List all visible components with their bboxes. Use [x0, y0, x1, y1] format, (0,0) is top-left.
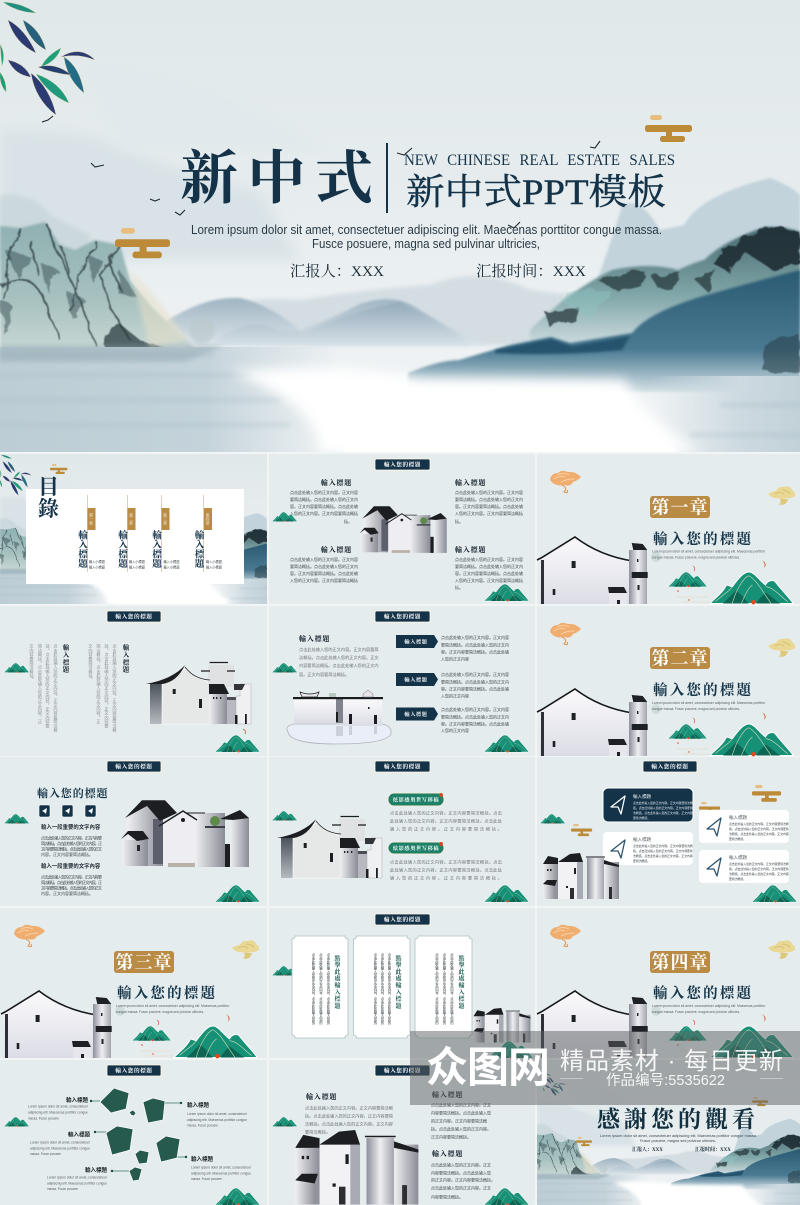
pentagon labels: adipiscing elit. Maecenas porttitor congue	[187, 1118, 247, 1122]
scroll card three text: 点击此处输入您的正文内容，点击此处输入您的	[449, 952, 454, 1025]
pentagon labels: adipiscing elit. Maecenas porttitor congue	[191, 1172, 251, 1176]
scroll card one text: 点击此处输入您的正文内容，点击此处输入您的	[326, 952, 330, 1025]
header pill	[375, 611, 430, 622]
icon: mountain	[488, 1041, 533, 1058]
green tag one: 炫影感奥世写移稿	[392, 796, 439, 804]
dark card: 点击此处输入您的正文内容。正文内容要简洁概	[633, 801, 693, 805]
icon: mountain	[752, 885, 797, 902]
pentagon labels	[28, 1096, 252, 1191]
vertical text left: 文内容要简洁概括。	[29, 643, 34, 682]
header pill: 輸入您的標題	[115, 613, 153, 621]
chapter caption: Lorem ipsum dolor sit amet, consectetuer adipiscing elit. Maecenas porttitor	[652, 701, 766, 705]
vertical text right: 輸入標題	[121, 643, 129, 674]
pentagon labels: Lorem ipsum dolor sit amet, consectetuer	[28, 1104, 89, 1108]
white card right top: 括。点击此处输入您的正文内容。正文内容要简	[729, 827, 789, 831]
panel: chapter two	[537, 606, 800, 756]
text block two: 点击此处输入您的正文内容。正文内容要	[41, 874, 102, 880]
panel: slide cards	[537, 757, 800, 906]
chapter title: 輸入您的標題	[117, 984, 217, 1002]
text two: 点击此处输入您的正文内容。正文内容要简洁概括。点击	[390, 858, 502, 866]
header pill	[375, 761, 430, 772]
text two: 此处输入您的正文内容。正文内容要简洁概括。点击此处	[390, 866, 503, 874]
left text column: 要简洁概括。点击此处输入您的正文内	[290, 563, 358, 569]
header pill	[107, 1065, 161, 1076]
text block two: 輸入一段重要的文字內容	[41, 862, 101, 870]
green tag one	[388, 793, 444, 806]
text block right: 正文内容要简洁概括。	[431, 1134, 471, 1140]
text block: 内容要简洁概括。点击此处输入您的正文内	[299, 662, 379, 669]
icon: mountain	[215, 885, 260, 902]
white card right top: 要简洁概括。	[729, 837, 746, 841]
scroll card one text: 点击此处输入您的正文内容，点击此处输入您的	[311, 952, 315, 1025]
header pill	[375, 459, 430, 470]
white card right top: 洁概括。点击此处输入您的正文内容。正文内容	[729, 832, 789, 836]
chapter tag: 第二章	[652, 648, 708, 668]
vertical text left	[29, 643, 69, 733]
panel: slide vertical text with house	[0, 606, 267, 756]
contents columns: 第一章	[89, 512, 94, 526]
text block two: 内容。正文内容要简洁概括。	[41, 890, 93, 896]
panel: chapter four	[537, 908, 800, 1058]
icon: ornaments	[571, 785, 781, 836]
white card	[603, 832, 693, 865]
white card: 輸入標題	[633, 836, 651, 843]
dark card	[603, 788, 693, 822]
text block right: 内容要简洁概括。点击此处输入您	[431, 1110, 491, 1116]
text block left: 点击此处输入您的正文内容。正文内容要简洁概	[305, 1104, 393, 1112]
chapter caption	[652, 701, 766, 711]
right text column: 点击此处输入您的正文内容。正文内容	[455, 556, 523, 562]
heading: 輸入您的標題	[37, 786, 108, 800]
panel: chapter one	[537, 454, 800, 604]
scroll card one text: 點擊此處輸入標題	[333, 954, 340, 1010]
text block right: 的正文内容。正文内容要简洁概	[431, 1118, 487, 1124]
text block right: 点击此处输入您的正文内容。正文	[431, 1184, 491, 1190]
tall house cluster	[295, 1130, 418, 1205]
chapter caption: congue massa. Fusce posuere, magna sed pulvinar ultricies,	[116, 1010, 204, 1014]
contents columns: 輸入標題	[192, 529, 204, 569]
text block right	[431, 1090, 495, 1200]
text block one: 点击此处输入您的正文内容。正文内容要	[41, 834, 102, 840]
text block right: 点击此处输入您的正文内容。正文	[431, 1102, 491, 1108]
left text column	[290, 478, 358, 583]
icon: bamboo	[0, 455, 31, 495]
contents columns: 輸入小標題	[164, 559, 180, 564]
watermark slogan: 精品素材 · 每日更新	[560, 1048, 783, 1075]
scroll card three text: 点击此处输入您的正文内容，点击此处输入您的	[442, 952, 446, 1025]
contents heading: 錄	[38, 497, 59, 521]
scroll card two text: 点击此处输入您的正文内容，点击此处输入您的	[373, 952, 377, 1025]
icon: small mountain	[272, 512, 297, 522]
text block: 容。正文内容要简洁概括。	[299, 671, 349, 678]
left text column: 点击此处输入您的正文内容。正文内容	[290, 556, 358, 562]
text one	[390, 810, 503, 832]
right text column	[455, 478, 523, 590]
header pill: 輸入您的標題	[384, 461, 422, 469]
pentagon labels: 輸入標題	[68, 1130, 90, 1138]
caption: Fusce posuere, magna sed pulvinar ultricies,	[640, 1138, 716, 1143]
chapter title: 輸入您的標題	[653, 984, 753, 1002]
report time: 汇报时间：XXX	[695, 1146, 731, 1153]
header pill: 輸入您的標題	[115, 763, 153, 771]
text block right: 的正文内容。正文内容要简洁概括。	[431, 1176, 495, 1182]
contents columns: 輸入小標題	[89, 564, 106, 570]
arrow tag texts: 容。正文内容要简洁概括。点击此处输	[441, 720, 509, 726]
header pill: 輸入您的標題	[115, 1067, 153, 1075]
arrow tag texts: 点击此处输入您的正文内容。正文内容	[441, 706, 509, 712]
chapter caption: congue massa. Fusce posuere, magna sed pulvinar ultricies,	[652, 556, 740, 560]
vertical text right: 文内容要简洁概括。	[88, 643, 94, 682]
pentagon labels: adipiscing elit. Maecenas porttitor congue	[47, 1182, 107, 1186]
pentagon labels: Lorem ipsum dolor sit amet, consectetuer	[187, 1112, 248, 1116]
pentagon labels: Lorem ipsum dolor sit amet, consectetuer	[191, 1166, 252, 1170]
icon: small mountain	[4, 1117, 29, 1127]
right text column: 輸入標題	[455, 545, 486, 554]
arrow tags	[396, 635, 438, 720]
contents columns	[76, 495, 223, 572]
chapter caption	[116, 1004, 230, 1014]
pentagon labels: 輸入標題	[66, 1096, 88, 1104]
text block left: 輸入標題	[306, 1092, 337, 1101]
dark card: 要简洁概括。	[633, 816, 650, 820]
text block left: 洁概括。点击此处输入您的正文内容。正文内容	[305, 1120, 393, 1128]
scroll card three text	[434, 952, 464, 1025]
pentagon labels: massa. Fusce posuere	[28, 1116, 59, 1120]
panel: chapter three	[0, 908, 267, 1058]
icon: mountain	[484, 885, 529, 902]
text block right: 輸入標題	[432, 1149, 463, 1158]
contents columns: 第四章	[206, 512, 210, 526]
arrow tags: 輸入標題	[404, 638, 428, 646]
icon: birds	[42, 116, 600, 228]
white card: 点击此处输入您的正文内容。正文内容要简洁概	[633, 844, 693, 848]
scroll card two text	[373, 952, 401, 1025]
arrow tag texts: 容。正文内容要简洁概括。点击此处输	[441, 648, 509, 654]
watermark number: 作品编号:5535622	[606, 1072, 725, 1089]
text block one: 内容。正文内容要简洁概括。	[41, 851, 93, 857]
thank-you title: 感謝您的觀看	[597, 1107, 755, 1132]
vertical text right	[88, 643, 129, 733]
left text column: 入您的正文内容。正文内容要简洁概括	[290, 577, 358, 583]
text block one: 简洁概括。点击此处输入您的正文内容。正	[41, 840, 102, 846]
panel: slide two text columns with houses	[269, 454, 535, 604]
watermark logo: 众图网	[426, 1044, 550, 1091]
chapter caption: Lorem ipsum dolor sit amet, consectetuer adipiscing elit. Maecenas porttitor	[652, 1004, 766, 1008]
header pill: 輸入您的標題	[651, 763, 689, 771]
text block one: 輸入一段重要的文字內容	[41, 823, 101, 831]
text block two	[41, 862, 102, 896]
icon: small mountain	[4, 814, 29, 824]
arrow tags: 輸入標題	[404, 676, 428, 684]
pentagon labels: massa. Fusce posuere	[191, 1177, 222, 1181]
chapter caption	[652, 1004, 766, 1014]
pentagon labels: 輸入標題	[85, 1166, 107, 1174]
report time label: 汇报时间：XXX	[476, 262, 586, 280]
house cluster	[360, 506, 447, 553]
right text column: 容。正文内容要简洁概括。点击此处输	[455, 503, 523, 509]
scroll card two text: 點擊此處輸入標題	[394, 954, 401, 1010]
scroll cards	[292, 936, 472, 1038]
arrow tag texts: 入您的正文内容	[441, 656, 469, 662]
icon: mountain	[484, 584, 529, 602]
arrow tag texts: 容。正文内容要简洁概括。点击此处输	[441, 686, 509, 692]
right text column: 入您的正文内容。正文内容要简洁概括	[455, 577, 523, 583]
right text column: 要简洁概括。点击此处输入您的正文内	[455, 496, 523, 502]
chapter title: 輸入您的標題	[653, 530, 753, 548]
pentagon labels: adipiscing elit. Maecenas porttitor congue	[28, 1110, 88, 1114]
reporter: 汇报人：XXX	[632, 1146, 663, 1153]
chapter tag: 第一章	[652, 498, 708, 518]
right text column: 輸入標題	[455, 478, 486, 487]
scroll card two text: 点击此处输入您的正文内容，点击此处输入您的	[380, 952, 384, 1025]
text block one	[41, 823, 102, 857]
white card: 括。点击此处输入您的正文内容。正文内容要简	[633, 849, 693, 853]
text block: 洁概括。点击此处输入您的正文内容。正文	[299, 654, 379, 661]
connectors	[90, 1100, 187, 1172]
divider	[386, 143, 388, 213]
contents columns: 第三章	[163, 512, 168, 526]
white card right top: 輸入標題	[729, 814, 747, 821]
white card right top	[699, 810, 789, 843]
chapter caption: Lorem ipsum dolor sit amet, consectetuer adipiscing elit. Maecenas porttitor	[116, 1004, 230, 1008]
lorem paragraph	[191, 222, 662, 251]
vertical text left: 简洁概括。点击此处输入您的正文内容。正	[37, 643, 43, 724]
panel: slide house with green tags	[269, 757, 535, 906]
icon: small mountain	[272, 811, 297, 821]
white card right bottom: 輸入標題	[729, 854, 747, 861]
contents columns: 輸入標題	[116, 529, 128, 569]
left text column: 輸入標題	[321, 478, 352, 487]
text two	[390, 858, 503, 882]
icon: gold cloud ornament left	[115, 228, 170, 258]
house cluster	[121, 800, 249, 867]
arrow tag texts: 要简洁概括。点击此处输入您的正文内	[441, 642, 509, 648]
panel: slide title icons and house cluster	[0, 757, 267, 906]
left text column: 容。正文内容要简洁概括。点击此处输	[290, 570, 358, 576]
pentagon labels: 輸入標題	[191, 1155, 214, 1163]
contents columns: 輸入小標題	[206, 559, 223, 564]
icon: bamboo leaves	[0, 2, 95, 115]
icon: bamboo	[543, 1073, 566, 1096]
left text column: 要简洁概括。点击此处输入您的正文内	[290, 496, 358, 502]
green tag two	[388, 842, 444, 854]
text block: 点击此处输入您的正文内容。正文内容要简	[299, 646, 379, 653]
vertical text right: 括。点击此处输入您的正文内容。正文内容要	[104, 643, 110, 729]
pentagon labels: massa. Fusce posuere	[30, 1152, 61, 1156]
house	[277, 816, 382, 878]
contents columns: 輸入小標題	[129, 559, 146, 564]
caption: Lorem ipsum dolor sit amet, consectetuer adipiscing elit. Maecenas porttitor congue massa.	[600, 1133, 757, 1138]
icon: small mountain	[272, 966, 297, 976]
icon: gold cloud ornament right	[645, 115, 692, 142]
panel: thank-you slide	[537, 1060, 800, 1205]
contents columns: 輸入小標題	[164, 564, 180, 570]
header pill: 輸入您的標題	[384, 763, 422, 771]
icon: ornaments	[576, 1097, 768, 1146]
white card right bottom	[699, 850, 789, 883]
text one: 此处输入您的正文内容。正文内容要简洁概括。点击此处	[390, 818, 503, 824]
pentagon labels: massa. Fusce posuere	[187, 1124, 218, 1128]
text block	[299, 634, 379, 678]
header pill: 輸入您的標題	[384, 613, 422, 621]
contents columns: 輸入標題	[76, 529, 88, 569]
pentagon labels: 輸入標題	[187, 1101, 210, 1109]
right text column: 点击此处输入您的正文内容。正文内容	[455, 489, 523, 495]
title: 新中式: 新中式	[180, 146, 373, 211]
panel: slide tall house	[269, 1060, 535, 1205]
white card	[26, 489, 244, 584]
header pill	[375, 914, 430, 925]
watermark banner	[410, 1031, 800, 1105]
header pill	[107, 611, 161, 622]
lorem paragraph: Lorem ipsum dolor sit amet, consectetuer adipiscing elit. Maecenas porttitor congue massa.	[191, 222, 662, 237]
white card right top: 点击此处输入您的正文内容。正文内容要简洁概	[729, 822, 789, 826]
arrow tags: 輸入標題	[404, 710, 428, 718]
chapter title: 輸入您的標題	[653, 681, 753, 699]
vertical text right: 简洁概括。点击此处输入您的正文内容。正	[96, 643, 102, 724]
text block one: 文内容要简洁概括。点击此处输入您的正文	[41, 846, 102, 852]
pentagon chart	[100, 1088, 180, 1181]
vertical text right: 点击此处输入您的正文内容。正文内容要简洁概	[112, 644, 118, 733]
text block right: 括。点击此处输入您的正文内容。	[431, 1126, 491, 1132]
icon: mountain	[484, 735, 529, 752]
text block right: 点击此处输入您的正文内容。正文	[431, 1162, 491, 1168]
caption	[600, 1133, 757, 1143]
vertical text left: 輸入標題	[61, 643, 69, 674]
text block left: 括。点击此处输入您的正文内容。正文内容要简	[305, 1112, 393, 1120]
pentagon labels: Lorem ipsum dolor sit amet, consectetuer	[30, 1140, 91, 1144]
text block right: 輸入標題	[432, 1090, 463, 1099]
contents columns: 輸入小標題	[206, 564, 223, 570]
scroll card one text: 点击此处输入您的正文内容，点击此处输入您的	[318, 952, 322, 1025]
white card: 洁概括。点击此处输入您的正文内容。正文内容	[633, 854, 693, 858]
text block right: 内容要简洁概括。	[431, 1194, 463, 1200]
reporter label: 汇报人：XXX	[290, 262, 384, 280]
header pill	[375, 1065, 430, 1076]
left text column: 容。正文内容要简洁概括。点击此处输	[290, 503, 358, 509]
arrow tag texts: 点击此处输入您的正文内容。正文内容	[441, 671, 509, 677]
header pill	[107, 761, 161, 772]
dark card: 括。点击此处输入您的正文内容。正文内容要简	[633, 806, 693, 810]
arrow tag texts: 入您的正文内容	[441, 692, 469, 698]
pentagon labels: massa. Fusce posuere	[47, 1187, 78, 1191]
right text column: 要简洁概括。点击此处输入您的正文内	[455, 563, 523, 569]
lake house	[287, 690, 391, 744]
panel: hero cover slide	[0, 0, 800, 460]
arrow tag texts: 要简洁概括。点击此处输入您的正文内	[441, 714, 509, 720]
right text column: 容。正文内容要简洁概括。点击此处输	[455, 570, 523, 576]
dark card: 輸入標題	[633, 793, 651, 800]
scroll card one text	[311, 952, 340, 1025]
contents heading: 目	[38, 475, 59, 499]
left text column: 入您的正文内容。正文内容要简洁概括	[290, 510, 358, 516]
header pill: 輸入您的標題	[384, 916, 422, 924]
house	[146, 662, 251, 724]
text block two: 文内容要简洁概括。点击此处输入您的正文	[41, 884, 102, 890]
pentagon labels: Lorem ipsum dolor sit amet, consectetuer	[47, 1176, 108, 1180]
chapter caption: Lorem ipsum dolor sit amet, consectetuer adipiscing elit. Maecenas porttitor	[652, 550, 766, 554]
arrow tag texts: 要简洁概括。点击此处输入您的正文内	[441, 678, 509, 684]
green tag two: 炫影感奥世写移稿	[392, 844, 439, 852]
scroll card three text: 點擊此處輸入標題	[457, 954, 464, 1010]
text block left: 要简洁概括。	[305, 1128, 330, 1136]
chapter caption: congue massa. Fusce posuere, magna sed pulvinar ultricies,	[652, 1010, 740, 1014]
contents columns: 輸入標題	[150, 529, 162, 569]
panel: slide lake house with arrow tags	[269, 606, 535, 756]
chapter caption: congue massa. Fusce posuere, magna sed pulvinar ultricies,	[652, 707, 740, 711]
house cluster	[474, 1008, 530, 1042]
chapter caption	[652, 550, 766, 560]
panel: table of contents slide	[0, 454, 267, 607]
header pill	[643, 761, 697, 772]
arrow tag texts: 点击此处输入您的正文内容。正文内容	[441, 634, 509, 640]
text block left	[305, 1092, 393, 1136]
contents columns: 輸入小標題	[89, 559, 106, 564]
contents heading	[38, 475, 59, 521]
english subtitle: NEW CHINESE REAL ESTATE SALES	[404, 152, 675, 169]
subtitle: 新中式PPT模板: 新中式PPT模板	[406, 172, 666, 212]
arrow tag texts	[441, 634, 509, 733]
icon: small mountain	[540, 814, 565, 824]
white card: 要简洁概括。	[633, 859, 650, 863]
left text column: 括。	[344, 518, 352, 524]
chapter tag: 第四章	[652, 952, 708, 972]
left text column: 点击此处输入您的正文内容。正文内容	[290, 489, 358, 495]
dark card: 洁概括。点击此处输入您的正文内容。正文内容	[633, 811, 693, 815]
white card right bottom: 要简洁概括。	[729, 877, 746, 881]
text one: 输入您的正文内容。正文内容要简洁概括。	[390, 826, 502, 832]
header pill: 輸入您的標題	[384, 1067, 422, 1075]
panel: slide pentagons	[0, 1060, 267, 1205]
text block right: 内容要简洁概括。点击此处输入您	[431, 1170, 491, 1176]
pentagon labels: adipiscing elit. Maecenas porttitor congue	[30, 1146, 90, 1150]
icon: ornament	[50, 464, 67, 474]
house cluster	[543, 853, 619, 899]
right text column: 括。	[455, 584, 463, 590]
icon: mountain	[215, 1188, 260, 1205]
vertical text left: 括。点击此处输入您的正文内容。正文内容要	[45, 643, 50, 729]
icon: small mountain	[272, 1117, 297, 1127]
contents columns: 輸入小標題	[129, 564, 146, 570]
scroll card three text: 点击此处输入您的正文内容，点击此处输入您的	[434, 952, 438, 1025]
vertical text left: 点击此处输入您的正文内容。正文内容要简洁概	[53, 644, 58, 733]
icon: mountain	[484, 1188, 529, 1205]
white card right bottom: 括。点击此处输入您的正文内容。正文内容要简	[729, 867, 789, 871]
chapter tag: 第三章	[116, 952, 172, 972]
scroll card two text: 点击此处输入您的正文内容，点击此处输入您的	[387, 952, 391, 1025]
text block: 輸入標題	[299, 634, 330, 643]
left text column: 輸入標題	[321, 545, 352, 554]
arrow tag texts: 入您的正文内容	[441, 727, 469, 733]
right text column: 入您的正文内容。正文内容要简洁概括	[455, 510, 523, 516]
icon: small mountain	[272, 663, 297, 673]
text two: 输入您的正文内容。正文内容要简洁概括。	[390, 874, 502, 882]
lorem paragraph: Fusce posuere, magna sed pulvinar ultricies,	[312, 236, 540, 251]
panel: slide scroll cards	[269, 908, 535, 1058]
white card right bottom: 点击此处输入您的正文内容。正文内容要简洁概	[729, 862, 789, 866]
white card right bottom: 洁概括。点击此处输入您的正文内容。正文内容	[729, 872, 789, 876]
text one: 点击此处输入您的正文内容。正文内容要简洁概括。点击	[390, 810, 502, 816]
text block two: 简洁概括。点击此处输入您的正文内容。正	[41, 879, 102, 885]
icon: mountain	[215, 735, 260, 752]
icon squares	[39, 805, 96, 817]
contents columns: 第二章	[129, 512, 134, 526]
right text column: 括。	[455, 518, 463, 524]
icon: small mountain	[4, 663, 29, 673]
